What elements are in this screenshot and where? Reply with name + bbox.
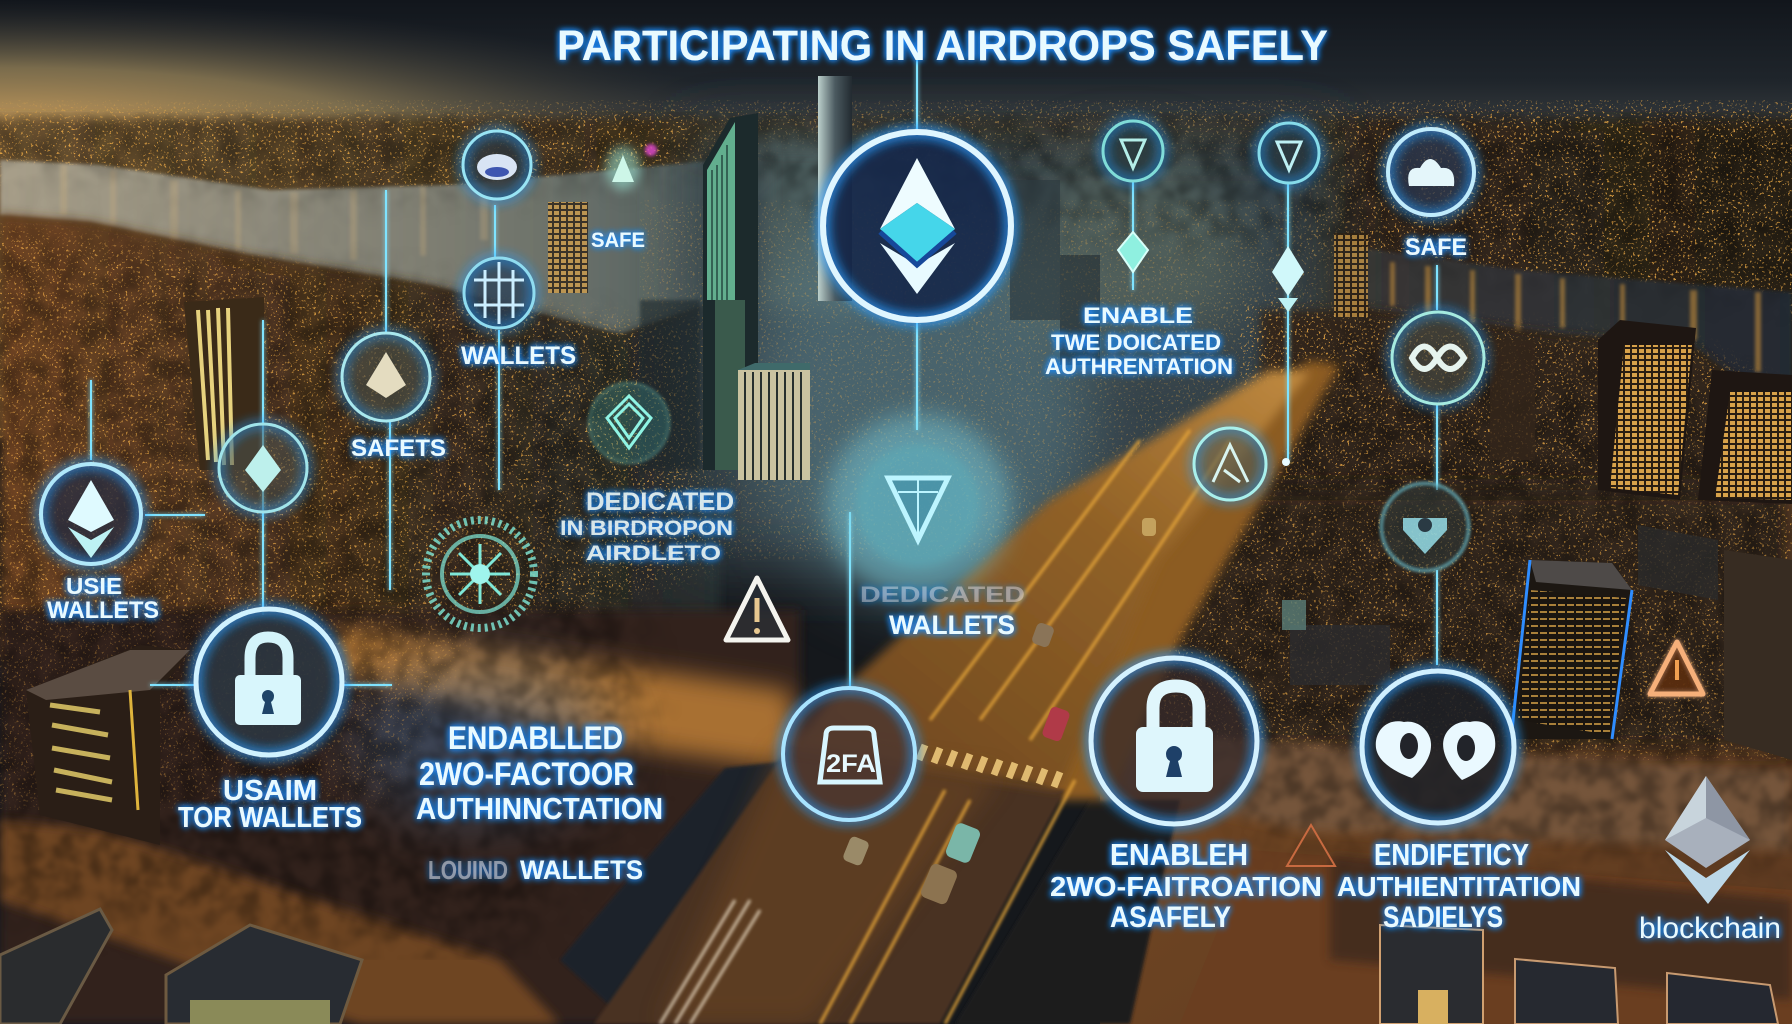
background: far shore city	[0, 100, 1792, 438]
text block: authentication safely: AUTHIENTITATION	[1337, 871, 1581, 902]
text block: loud wallets	[428, 855, 643, 885]
icon: top left cloud badge	[463, 131, 531, 199]
text block: use wallets	[47, 573, 159, 624]
icon: shield badge two	[1259, 123, 1319, 183]
buildings: right low blocks	[1282, 525, 1792, 760]
text block: dedicated wallets centre	[860, 582, 1025, 640]
icon: large ethereum circle	[823, 132, 1011, 320]
label: safe right: SAFE	[1405, 234, 1467, 261]
icon: faint warning triangle	[1287, 825, 1335, 866]
icon: 2FA badge	[783, 688, 915, 820]
buildings: right towers	[1490, 320, 1792, 504]
text block: dedicated wallets centre: DEDICATED	[860, 582, 1025, 607]
text block: usaim for wallets	[178, 775, 362, 834]
cars	[842, 518, 1156, 906]
text block: enable two-factor safely: ENABLEH	[1110, 837, 1248, 872]
background: lower left district	[0, 590, 800, 1024]
label: safe left: SAFE	[591, 229, 645, 252]
text block: enabled two-factor authentication left	[416, 720, 663, 826]
icon: network badge	[1381, 483, 1469, 571]
icon: blockchain ethereum logo	[1665, 776, 1750, 904]
text block: enabled two-factor authentication left: AUTHINNCTATION	[416, 791, 663, 826]
icon: shield hologram	[826, 414, 1010, 598]
text block: usaim for wallets: USAIM	[223, 775, 317, 807]
label: safets: SAFETS	[351, 435, 446, 462]
icon: gear dial	[426, 520, 534, 628]
label: wallets top: WALLETS	[461, 342, 576, 370]
icon: safets diamond badge	[342, 333, 430, 421]
text block: dedicated in airdrops: IN BIRDROPON	[560, 517, 733, 540]
icon: globe badge	[464, 258, 534, 328]
text block: enable two dedicated authentication top	[1045, 303, 1233, 379]
title: PARTICIPATING IN AIRDROPS SAFELY	[557, 22, 1328, 70]
crosswalk	[919, 745, 1060, 787]
text block: use wallets: USIE	[66, 573, 122, 599]
text block: enable two dedicated authentication top: TWE DOICATED	[1051, 330, 1221, 355]
rooftops: bottom left	[0, 909, 362, 1024]
text block: dedicated wallets centre: WALLETS	[889, 610, 1015, 640]
text block: enable two dedicated authentication top: AUTHRENTATION	[1045, 354, 1233, 379]
icon: padlock left	[196, 609, 342, 755]
background: left city mass	[0, 215, 720, 660]
icon: small ethereum diamond upper	[1118, 232, 1148, 272]
text block: enabled two-factor authentication left: ENDABLLED	[448, 720, 623, 756]
2FA label: 2FA	[826, 750, 876, 778]
text block: enabled two-factor authentication left: 2WO-FACTOOR	[419, 756, 634, 792]
background: right district ground	[955, 490, 1792, 1024]
icon: hearts badge	[1362, 671, 1514, 823]
icon: mountain badge	[1194, 428, 1266, 500]
icon: padlock right	[1091, 658, 1257, 824]
text block: dedicated in airdrops: AIRDLETO	[586, 542, 721, 565]
rooftops: bottom right	[1380, 925, 1778, 1024]
background: mid right city	[1240, 300, 1792, 540]
background: sky	[0, 0, 1792, 135]
background: centre city haze	[640, 130, 1330, 610]
text block: authentication safely	[1337, 837, 1581, 934]
buildings: central towers	[548, 76, 1368, 480]
text block: loud wallets: LOUIND	[428, 855, 508, 885]
icon: cloud shield badge	[1388, 129, 1474, 215]
text block: enable two dedicated authentication top: ENABLE	[1083, 303, 1193, 328]
text block: authentication safely: ENDIFETICY	[1374, 837, 1529, 872]
icon: teal location badge	[589, 383, 669, 463]
building: lower right tower	[1512, 560, 1632, 739]
text block: enable two-factor safely	[1050, 837, 1322, 934]
background: right bay water	[1340, 245, 1792, 420]
highway	[594, 360, 1340, 1024]
text block: authentication safely: SADIELYS	[1383, 901, 1503, 934]
background: left bay water	[0, 160, 720, 335]
text block: dedicated in airdrops: DEDICATED	[586, 488, 734, 516]
building: lower left block	[26, 645, 190, 845]
icon: small padlock badge	[606, 144, 657, 190]
connector lines	[91, 60, 1437, 690]
icon: shield badge one	[1103, 121, 1163, 181]
text block: dedicated in airdrops	[560, 488, 734, 565]
text block: usaim for wallets: TOR WALLETS	[178, 802, 362, 834]
text block: enable two-factor safely: ASAFELY	[1110, 901, 1231, 934]
text block: loud wallets: WALLETS	[520, 855, 643, 885]
icon: infinity badge	[1392, 312, 1484, 404]
icon: orange warning triangle	[1650, 642, 1703, 694]
icon: ethereum badge mid	[219, 424, 307, 512]
text block: enable two-factor safely: 2WO-FAITROATION	[1050, 871, 1322, 902]
text block: use wallets: WALLETS	[47, 597, 159, 624]
icon: small ethereum diamond lower	[1272, 246, 1304, 466]
building: left tower	[184, 297, 264, 470]
icon: warning triangle	[726, 578, 788, 640]
label: blockchain: blockchain	[1639, 912, 1781, 945]
icon: ethereum badge left	[41, 464, 141, 564]
